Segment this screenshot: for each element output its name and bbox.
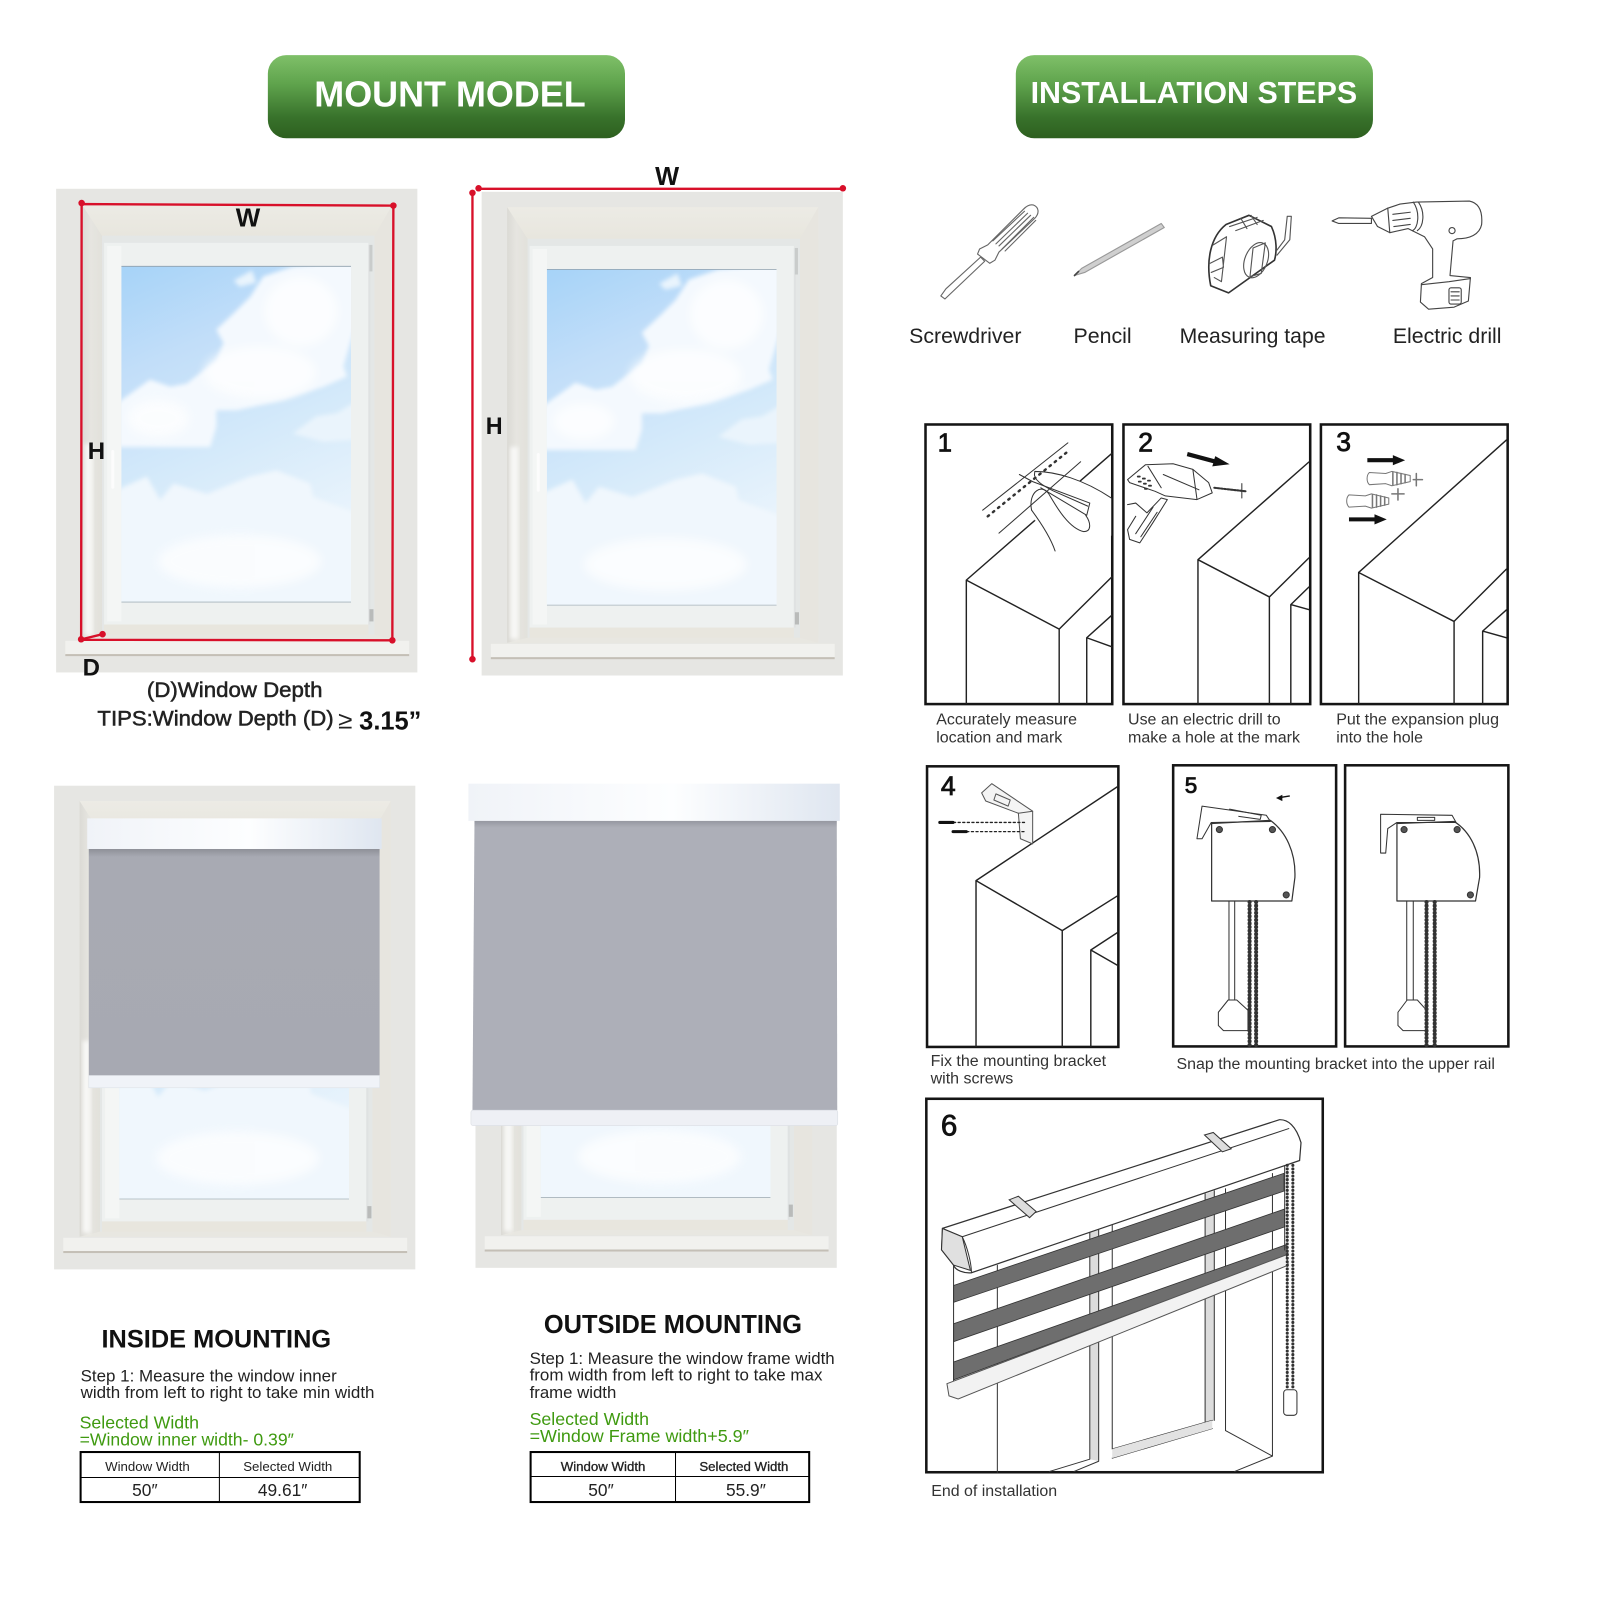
table: inside mounting widths — [81, 1452, 360, 1502]
photo: inside mount window with red measure lines — [56, 189, 417, 682]
panel: step 6 end of installation: 6 — [941, 1110, 957, 1143]
icon: bead chain — [1427, 902, 1435, 1046]
bottom rail — [947, 1255, 1288, 1399]
panel: step 5 snap bracket, closed — [1345, 765, 1508, 1046]
text: window depth tip: 3.15” — [359, 708, 421, 736]
caption: step 1: location and mark — [936, 729, 1062, 746]
panel: step 4 mounting bracket — [927, 766, 1118, 1047]
photo: outside mount window with red measure lines: W — [655, 163, 680, 191]
caption: step 3: into the hole — [1336, 729, 1423, 746]
label: tools — [909, 324, 1502, 348]
text block: inside mounting: Step 1: Measure the window inner — [81, 1367, 337, 1386]
table: inside mounting widths: 50″ — [132, 1480, 158, 1500]
panel: step 5 snap bracket, open: 5 — [1185, 773, 1197, 798]
table: outside mounting widths: Window Width — [561, 1459, 645, 1474]
text block: outside mounting: Selected Width — [530, 1409, 649, 1429]
caption: step 6: End of installation — [931, 1483, 1057, 1500]
arrow: upper plug — [1367, 455, 1405, 465]
label: tools: Measuring tape — [1180, 324, 1326, 348]
text: window depth tip: ≥ — [338, 708, 353, 735]
photo: inside mount window with red measure lines: D — [83, 655, 100, 682]
caption: step 2: Use an electric drill to — [1128, 711, 1281, 728]
text block: outside mounting: =Window Frame width+5.9″ — [530, 1426, 749, 1446]
icon: screwdriver — [941, 205, 1038, 299]
text block: outside mounting: OUTSIDE MOUNTING — [544, 1311, 802, 1339]
caption: step 5: Snap the mounting bracket into the upper rail — [1177, 1056, 1495, 1073]
arrow: drilling direction — [1187, 452, 1230, 466]
panel: step 4 mounting bracket: 4 — [941, 771, 956, 801]
photo: inside mounted roller shade — [54, 786, 415, 1269]
caption: step 2 — [1128, 711, 1300, 746]
text block: inside mounting: INSIDE MOUNTING — [102, 1325, 331, 1353]
panel: step 1 measure and mark — [926, 424, 1112, 704]
badge: installation steps — [1016, 55, 1373, 138]
text block: inside mounting: Selected Width — [80, 1413, 199, 1433]
table: outside mounting widths — [531, 1452, 809, 1502]
text: window depth tip: (D)Window Depth — [147, 679, 322, 702]
label: tools: Pencil — [1073, 324, 1132, 348]
table: inside mounting widths: 49.61″ — [258, 1480, 307, 1500]
label: tools: Screwdriver — [909, 324, 1021, 348]
icon: expansion plugs — [1347, 471, 1422, 508]
text block: inside mounting: =Window inner width- 0.39″ — [80, 1429, 294, 1449]
chain and pull — [1284, 1165, 1297, 1415]
caption: step 4: Fix the mounting bracket — [931, 1053, 1107, 1070]
icon: bead chain — [1250, 902, 1256, 1046]
arrow: lower plug — [1349, 514, 1387, 524]
caption: step 3 — [1336, 711, 1499, 746]
caption: step 2: make a hole at the mark — [1128, 729, 1300, 746]
panel: step 1 measure and mark: 1 — [938, 430, 952, 458]
panel: step 3 expansion plug — [1321, 424, 1508, 704]
arrow: snap direction — [1278, 796, 1290, 800]
icon: pencil — [1074, 223, 1164, 276]
panel: step 3 expansion plug: 3 — [1336, 427, 1351, 457]
panel: step 2 drill — [1123, 424, 1310, 704]
badge: mount model: MOUNT MODEL — [314, 75, 586, 115]
caption: step 1 — [936, 711, 1077, 746]
window behind the shade — [997, 1173, 1272, 1472]
text block: outside mounting: Step 1: Measure the window frame width — [530, 1349, 835, 1368]
text: window depth tip: TIPS:Window Depth (D) — [97, 708, 334, 731]
caption: step 1: Accurately measure — [936, 711, 1077, 728]
head rail — [942, 1120, 1301, 1273]
text: window depth tip — [97, 679, 421, 736]
table: outside mounting widths: 55.9″ — [726, 1480, 766, 1500]
text block: inside mounting — [80, 1325, 374, 1449]
icon: bracket and screws — [940, 784, 1033, 844]
icon: electric drill — [1332, 201, 1482, 309]
icon: measuring tape — [1209, 215, 1291, 293]
icon: hand marking with pencil — [983, 443, 1111, 551]
photo: outside mount window with red measure lines — [469, 163, 846, 676]
text block: outside mounting: from width from left to right to take max — [530, 1366, 823, 1385]
badge: installation steps: INSTALLATION STEPS — [1031, 76, 1357, 110]
text block: inside mounting: width from left to right to take min width — [80, 1383, 374, 1402]
photo: inside mount window with red measure lines: W — [236, 205, 261, 233]
text block: outside mounting — [530, 1311, 835, 1446]
icon: rail head with closed bracket — [1381, 814, 1480, 1031]
table: outside mounting widths: Selected Width — [699, 1459, 788, 1474]
label: tools: Electric drill — [1393, 324, 1502, 348]
fabric bands — [954, 1173, 1288, 1380]
table: outside mounting widths: 50″ — [588, 1480, 614, 1500]
caption: step 3: Put the expansion plug — [1336, 711, 1499, 728]
panel: step 2 drill: 2 — [1138, 428, 1153, 458]
panel: step 6 end of installation — [926, 1099, 1323, 1472]
icon: hand with drill — [1128, 464, 1246, 543]
table: inside mounting widths: Window Width — [105, 1459, 190, 1474]
icon: rail head with open bracket — [1197, 806, 1295, 1031]
caption: step 4 — [930, 1053, 1107, 1088]
photo: inside mount window with red measure lines: H — [88, 438, 105, 465]
caption: step 4: with screws — [930, 1071, 1013, 1088]
photo: outside mounted roller shade — [468, 784, 840, 1268]
panel: step 5 snap bracket, open — [1173, 765, 1336, 1046]
table: inside mounting widths: Selected Width — [243, 1459, 332, 1474]
photo: outside mount window with red measure lines: H — [486, 413, 503, 440]
text block: outside mounting: frame width — [530, 1383, 616, 1402]
badge: mount model — [268, 55, 625, 138]
